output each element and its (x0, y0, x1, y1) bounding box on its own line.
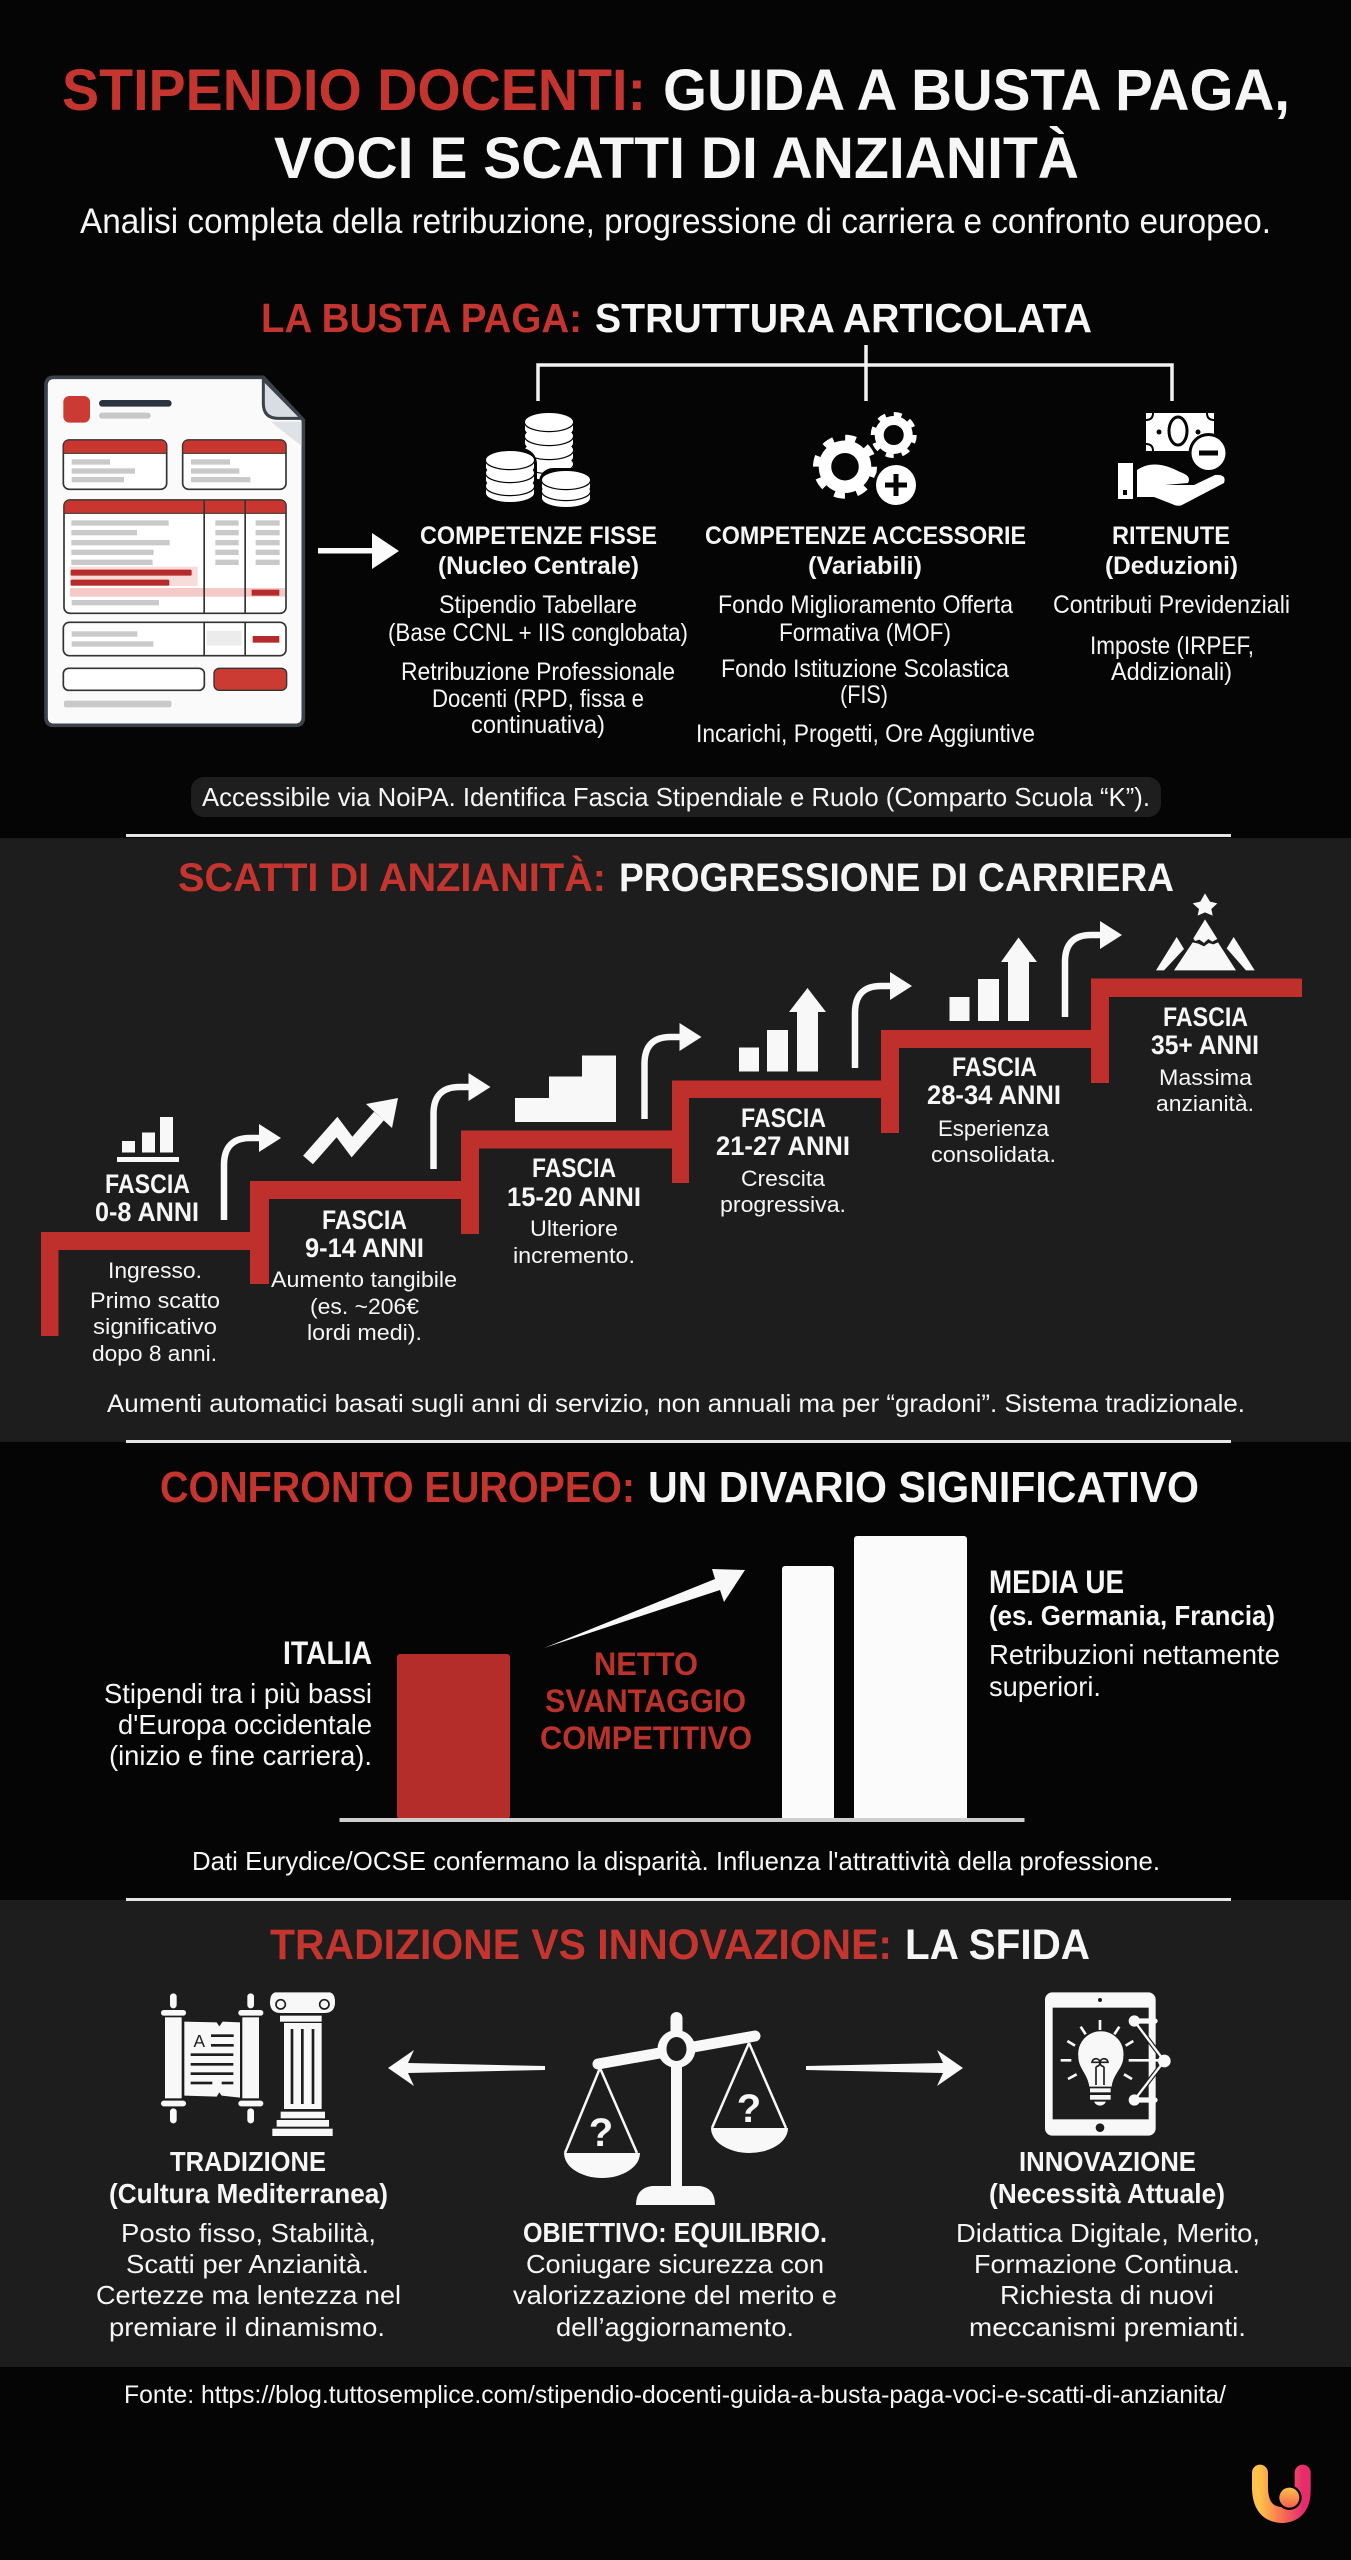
text: italia: ITALIA (283, 1635, 372, 1671)
step: fascia 15-20: incremento. (513, 1243, 635, 1268)
title: STIPENDIO DOCENTI: (62, 58, 646, 123)
icon: stairs (515, 1056, 616, 1122)
heading: tradizione: TRADIZIONE VS INNOVAZIONE: (270, 1921, 892, 1969)
column: competenze accessorie: Incarichi, Progetti, Ore Aggiuntive (696, 720, 1035, 748)
column: competenze fisse (388, 522, 688, 739)
note: automatic increases: Aumenti automatici basati sugli anni di servizio, non annuali ma per “gradoni”. Sistema tradizionale. (107, 1390, 1245, 1418)
staircase (41, 978, 1302, 1336)
column: innovazione: Formazione Continua. (974, 2249, 1240, 2279)
column: ritenute: Imposte (IRPEF, (1090, 632, 1254, 660)
text: media ue: (es. Germania, Francia) (989, 1600, 1275, 1631)
step: fascia 0-8: significativo (93, 1314, 217, 1339)
column: competenze fisse: Retribuzione Professionale (401, 658, 675, 686)
text: media ue: superiori. (989, 1671, 1101, 1702)
step: fascia 21-27 (716, 988, 850, 1217)
step: fascia 9-14 (271, 1098, 457, 1345)
title: VOCI E SCATTI DI ANZIANITÀ (274, 126, 1079, 191)
heading: la busta paga: LA BUSTA PAGA: (261, 295, 582, 341)
icon: bars with arrow (739, 988, 826, 1072)
column: innovazione: Didattica Digitale, Merito, (956, 2218, 1260, 2248)
callout: netto svantaggio: COMPETITIVO (540, 1720, 752, 1756)
column: competenze fisse: Docenti (RPD, fissa e (432, 685, 644, 713)
step: fascia 9-14: FASCIA (322, 1205, 407, 1235)
column: obiettivo (513, 2217, 837, 2342)
icon: scroll and column (161, 1992, 335, 2136)
note: eurydice: Dati Eurydice/OCSE confermano la disparità. Influenza l'attrattività della professione. (192, 1846, 1160, 1876)
step: fascia 21-27: progressiva. (720, 1192, 846, 1217)
heading: scatti (178, 855, 1174, 900)
column: competenze accessorie (696, 522, 1035, 748)
step: fascia 28-34: FASCIA (952, 1052, 1037, 1082)
icon: bars with tall arrow (950, 938, 1037, 1021)
step: fascia 9-14: lordi medi). (307, 1320, 422, 1345)
icon: coins (483, 413, 593, 510)
step: fascia 28-34: consolidata. (931, 1142, 1056, 1167)
column: competenze accessorie: Fondo Miglioramento Offerta (718, 591, 1013, 619)
subtitle: Analisi completa della retribuzione, progressione di carriera e confronto europeo. (80, 202, 1271, 241)
column: competenze accessorie: (FIS) (840, 681, 888, 709)
column: ritenute: Addizionali) (1111, 658, 1232, 686)
step: fascia 0-8: 0-8 ANNI (95, 1197, 199, 1227)
column: ritenute: (Deduzioni) (1105, 552, 1238, 580)
curved arrows (224, 921, 1122, 1220)
heading: la busta paga (261, 295, 1092, 341)
column: obiettivo: dell’aggiornamento. (556, 2312, 794, 2342)
heading: confronto: UN DIVARIO SIGNIFICATIVO (648, 1463, 1199, 1512)
column: innovazione: meccanismi premianti. (969, 2312, 1246, 2342)
heading: la busta paga: STRUTTURA ARTICOLATA (595, 295, 1092, 341)
heading: confronto: CONFRONTO EUROPEO: (160, 1463, 635, 1512)
icon: balance scales: ? (589, 2111, 613, 2155)
heading: scatti: SCATTI DI ANZIANITÀ: (178, 855, 606, 900)
callout: netto svantaggio (540, 1646, 752, 1756)
source line: Fonte: https://blog.tuttosemplice.com/stipendio-docenti-guida-a-busta-paga-voci-e-scatti-di-anzianita/ (124, 2381, 1226, 2409)
column: competenze fisse: (Base CCNL + IIS conglobata) (388, 619, 688, 647)
icon: scroll and column: A (194, 2031, 206, 2051)
callout: NoiPA note: Accessibile via NoiPA. Identifica Fascia Stipendiale e Ruolo (Comparto Scuola “K”). (202, 782, 1150, 812)
text: media ue: Retribuzioni nettamente (989, 1639, 1280, 1670)
arrow: right (806, 2050, 963, 2086)
title: GUIDA A BUSTA PAGA, (663, 58, 1290, 123)
step: fascia 9-14: (es. ~206€ (310, 1294, 419, 1319)
icon: balance scales: ? (737, 2087, 761, 2131)
panel: tradizione vs innovazione (96, 1921, 1260, 2342)
icon: small bars (117, 1117, 179, 1162)
step: fascia 15-20: 15-20 ANNI (507, 1182, 641, 1212)
column: tradizione: TRADIZIONE (170, 2146, 326, 2177)
column: competenze accessorie: (Variabili) (808, 552, 922, 580)
step: fascia 28-34: Esperienza (938, 1116, 1050, 1141)
column: innovazione: (Necessità Attuale) (989, 2178, 1225, 2209)
arrow: left (388, 2050, 545, 2086)
step: fascia 35+: 35+ ANNI (1151, 1030, 1259, 1060)
icon: tablet with bulb (1045, 1992, 1171, 2136)
step: fascia 35+ (1151, 893, 1259, 1116)
arrow: document to columns (318, 533, 399, 569)
column: ritenute (1053, 522, 1290, 686)
column: competenze accessorie: COMPETENZE ACCESSORIE (705, 522, 1026, 550)
column: ritenute: RITENUTE (1112, 522, 1230, 550)
tree connector (538, 345, 1172, 401)
column: innovazione: Richiesta di nuovi (1000, 2280, 1214, 2310)
step: fascia 15-20 (507, 1056, 641, 1268)
panel: confronto europeo (104, 1463, 1280, 1876)
heading: tradizione: LA SFIDA (905, 1921, 1090, 1969)
column: competenze fisse: Stipendio Tabellare (439, 591, 637, 619)
text: italia: (inizio e fine carriera). (109, 1740, 372, 1771)
column: innovazione (956, 2146, 1260, 2342)
icon: balance scales (564, 2012, 788, 2205)
heading: scatti: PROGRESSIONE DI CARRIERA (619, 856, 1174, 900)
text: media ue (989, 1564, 1280, 1702)
text: italia: Stipendi tra i più bassi (104, 1678, 372, 1709)
column: competenze fisse: continuativa) (471, 711, 605, 739)
column: obiettivo: OBIETTIVO: EQUILIBRIO. (523, 2217, 827, 2248)
step: fascia 21-27: Crescita (741, 1166, 826, 1191)
column: tradizione: Scatti per Anzianità. (126, 2249, 369, 2279)
step: fascia 28-34 (927, 938, 1061, 1167)
step: fascia 0-8: Primo scatto (90, 1288, 220, 1313)
panel: scatti di anzianità (41, 855, 1302, 1418)
column: tradizione: Certezze ma lentezza nel (96, 2280, 401, 2310)
column: tradizione: Posto fisso, Stabilità, (121, 2218, 376, 2248)
callout: netto svantaggio: SVANTAGGIO (545, 1683, 746, 1719)
step: fascia 15-20: Ulteriore (530, 1216, 618, 1241)
logo (1260, 2473, 1303, 2515)
step: fascia 21-27: FASCIA (741, 1103, 826, 1133)
column: competenze fisse: (Nucleo Centrale) (438, 552, 639, 580)
panel: la busta paga (46, 295, 1290, 817)
column: ritenute: Contributi Previdenziali (1053, 591, 1290, 619)
step: fascia 35+: Massima (1159, 1065, 1253, 1090)
column: tradizione: premiare il dinamismo. (109, 2312, 385, 2342)
icon: zigzag arrow (308, 1098, 398, 1160)
step: fascia 9-14: 9-14 ANNI (305, 1233, 424, 1263)
step: fascia 35+: anzianità. (1156, 1091, 1254, 1116)
column: tradizione (96, 2146, 401, 2342)
icon: payslip document (46, 377, 303, 725)
step: fascia 21-27: 21-27 ANNI (716, 1131, 850, 1161)
icon: hand with money and minus (1118, 413, 1228, 506)
text: italia: d'Europa occidentale (118, 1709, 372, 1740)
text: italia (104, 1635, 372, 1771)
step: fascia 15-20: FASCIA (532, 1153, 616, 1183)
column: tradizione: (Cultura Mediterranea) (109, 2178, 388, 2209)
bar chart (340, 1536, 1024, 1822)
icon: gears (818, 416, 919, 508)
step: fascia 35+: FASCIA (1163, 1002, 1248, 1032)
step: fascia 0-8: Ingresso. (108, 1258, 202, 1283)
column: obiettivo: valorizzazione del merito e (513, 2280, 837, 2310)
step: fascia 0-8: dopo 8 anni. (92, 1341, 217, 1366)
text: media ue: MEDIA UE (989, 1564, 1124, 1600)
column: competenze accessorie: Formativa (MOF) (779, 619, 951, 647)
column: competenze accessorie: Fondo Istituzione Scolastica (721, 655, 1009, 683)
arrow: gap (544, 1569, 745, 1648)
column: competenze fisse: COMPETENZE FISSE (420, 522, 657, 550)
step: fascia 0-8: FASCIA (105, 1169, 190, 1199)
step: fascia 28-34: 28-34 ANNI (927, 1080, 1061, 1110)
heading: confronto (160, 1463, 1199, 1512)
column: innovazione: INNOVAZIONE (1019, 2146, 1196, 2177)
step: fascia 9-14: Aumento tangibile (271, 1267, 457, 1292)
icon: mountain with star (1156, 893, 1255, 970)
step: fascia 0-8 (90, 1117, 220, 1366)
title (62, 58, 1290, 191)
column: obiettivo: Coniugare sicurezza con (526, 2249, 824, 2279)
callout: netto svantaggio: NETTO (594, 1646, 698, 1682)
